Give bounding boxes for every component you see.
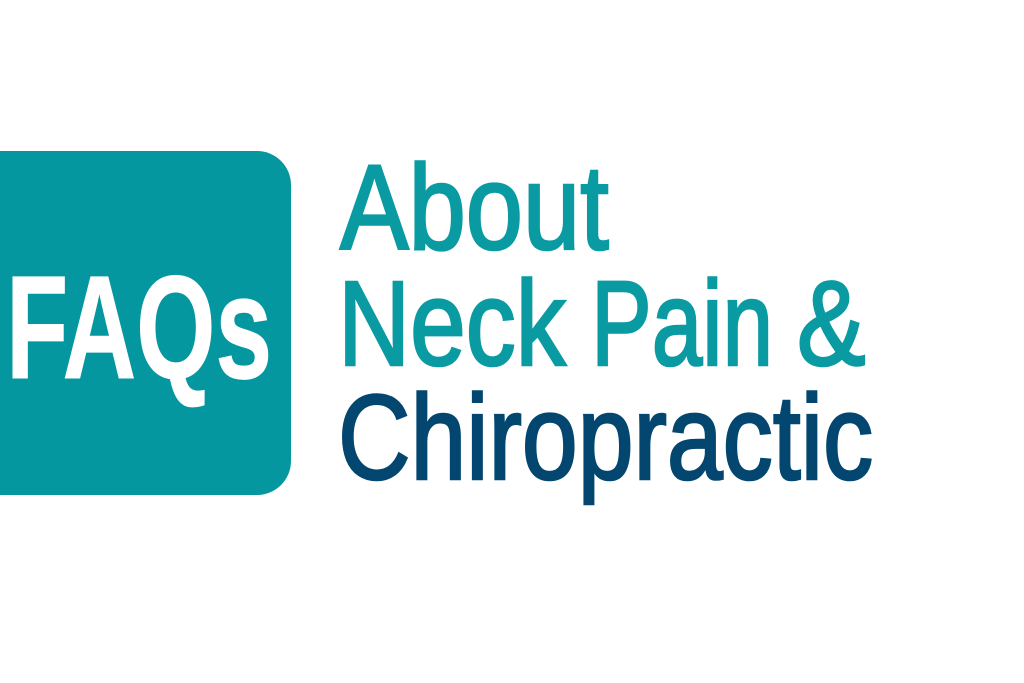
- panel: FAQs badge: [0, 151, 291, 495]
- heading line: Neck Pain &: [338, 255, 866, 391]
- heading line: Neck Pain &: Neck: [338, 255, 566, 391]
- heading line: Neck Pain &: Pain: [591, 255, 773, 391]
- badge text: FAQs: FAQs: [6, 246, 272, 410]
- heading line: About: About: [340, 139, 609, 275]
- heading line: Neck Pain &: &: [797, 255, 866, 391]
- heading: About Neck Pain & Chiropractic: [338, 139, 873, 506]
- heading line: Chiropractic: Chiropractic: [338, 369, 873, 505]
